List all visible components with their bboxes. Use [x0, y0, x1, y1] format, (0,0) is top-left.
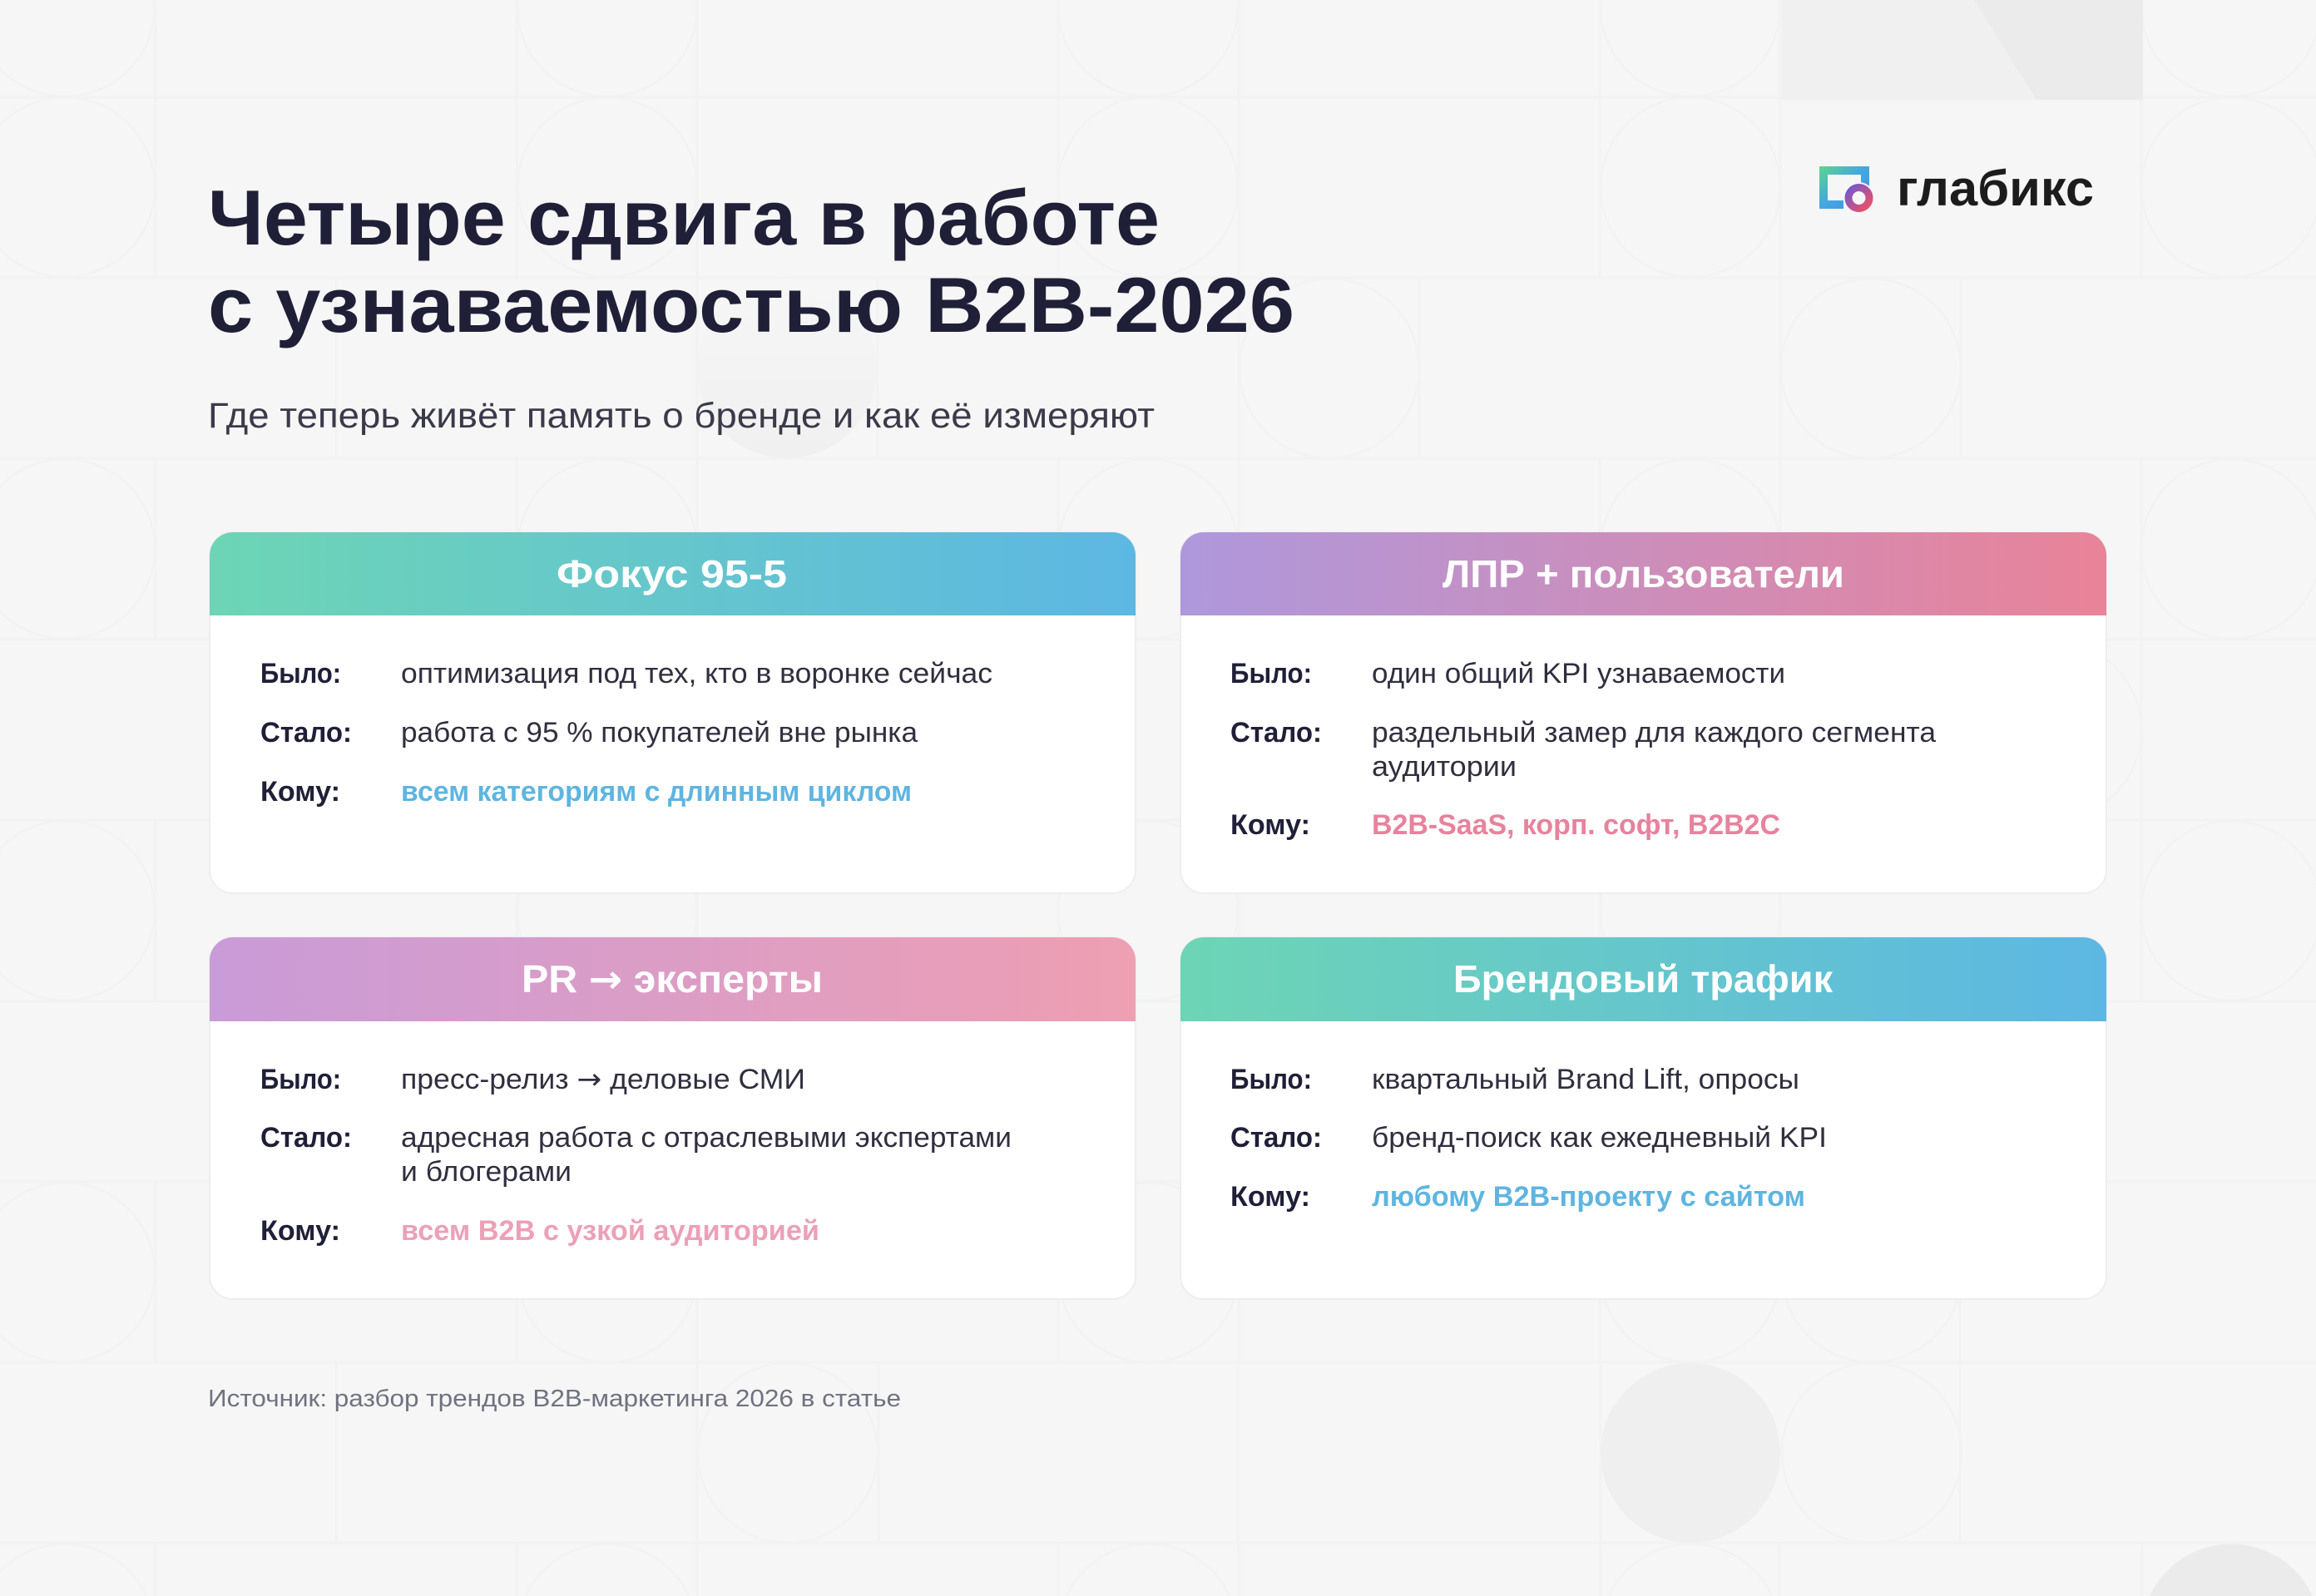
- row: кому: Кому:: [260, 776, 340, 808]
- logo: [1819, 161, 2094, 216]
- row: стало: бренд-поиск как ежедневный KPI: [1372, 1122, 1827, 1154]
- card heading: Брендовый трафик: [1453, 957, 1834, 1001]
- title: [208, 174, 1294, 348]
- row: было: один общий KPI узнаваемости: [1372, 658, 1785, 689]
- row: кому: Кому:: [1230, 809, 1310, 841]
- panel: PR → эксперты: [210, 937, 1136, 1299]
- card heading: ЛПР + пользователи: [1443, 552, 1844, 595]
- row: было: Было:: [260, 658, 341, 689]
- row: стало: Стало:: [260, 1122, 352, 1154]
- row: стало: [1230, 717, 1936, 783]
- source note: Источник: разбор трендов B2B-маркетинга 2026 в статье: [208, 1386, 901, 1412]
- row: стало: Стало:: [1230, 1122, 1322, 1154]
- panel: ЛПР + пользователи: [1180, 532, 2106, 893]
- row: стало: Стало:: [1230, 717, 1322, 749]
- row: стало: и блогерами: [401, 1156, 572, 1188]
- card heading: PR → эксперты: [522, 956, 823, 1001]
- row: кому: всем B2B с узкой аудиторией: [401, 1215, 819, 1247]
- row: стало: раздельный замер для каждого сегмента: [1372, 717, 1936, 749]
- row: было: оптимизация под тех, кто в воронке сейчас: [401, 658, 992, 689]
- row: стало: Стало:: [260, 717, 352, 749]
- title: Четыре сдвига в работе: [208, 174, 1160, 261]
- card heading: Фокус 95-5: [557, 552, 787, 595]
- row: было: квартальный Brand Lift, опросы: [1372, 1064, 1799, 1095]
- row: стало: работа с 95 % покупателей вне рынка: [401, 717, 918, 749]
- row: было: Было:: [1230, 658, 1312, 689]
- row: было: пресс-релиз → деловые СМИ: [401, 1063, 805, 1096]
- panel: Брендовый трафик: [1180, 937, 2106, 1299]
- panel: Фокус 95-5: [210, 532, 1136, 893]
- row: стало: адресная работа с отраслевыми экспертами: [401, 1122, 1012, 1154]
- row: кому: Кому:: [1230, 1181, 1310, 1213]
- row: кому: B2B-SaaS, корп. софт, B2B2C: [1372, 809, 1780, 841]
- subtitle: Где теперь живёт память о бренде и как её измеряют: [208, 396, 1155, 436]
- row: стало: аудитории: [1372, 751, 1517, 783]
- row: было: Было:: [260, 1064, 341, 1095]
- row: кому: всем категориям с длинным циклом: [401, 776, 912, 808]
- title: с узнаваемостью B2B-2026: [208, 261, 1294, 348]
- icon: logo frame and ring: [1819, 166, 1875, 214]
- row: было: Было:: [1230, 1064, 1312, 1095]
- row: кому: любому B2B-проекту с сайтом: [1372, 1181, 1805, 1213]
- row: стало: [260, 1122, 1012, 1188]
- row: кому: Кому:: [260, 1215, 340, 1247]
- logo wordmark: глабикс: [1897, 161, 2094, 216]
